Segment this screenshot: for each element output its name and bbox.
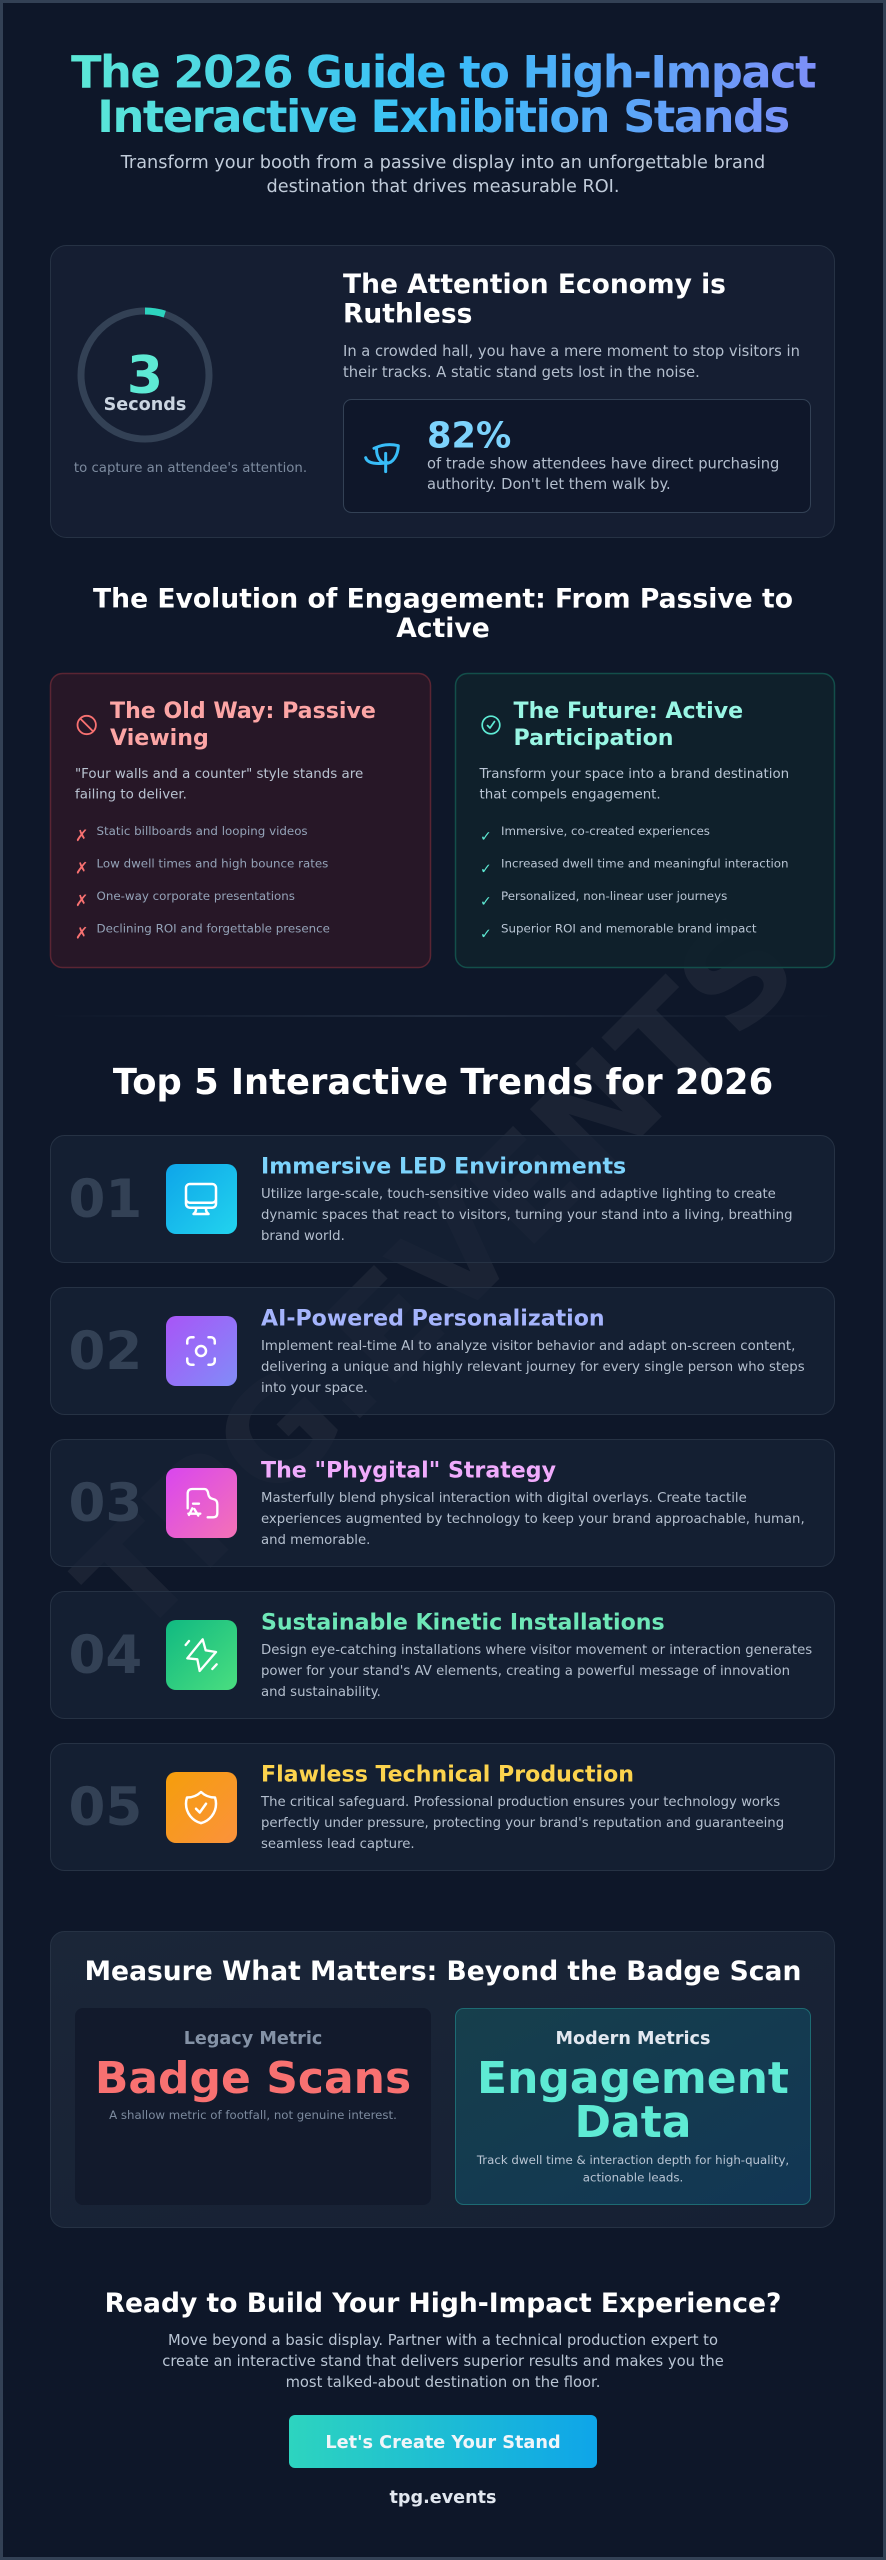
cta button: Let's Create Your Stand: [325, 2433, 561, 2453]
future list: ✓: [480, 862, 492, 878]
trend card 1: Immersive LED Environments: [261, 1154, 626, 1180]
old way list: ✗: [75, 891, 88, 910]
cta button: [289, 2415, 597, 2468]
trend card 5: perfectly under pressure, protecting your brand's reputation and guaranteeing: [261, 1816, 784, 1831]
future list: Personalized, non-linear user journeys: [501, 889, 727, 903]
modern metrics box: Data: [575, 2097, 691, 2148]
trend card 4: Sustainable Kinetic Installations: [261, 1610, 665, 1636]
attention heading: The Attention Economy is: [343, 269, 726, 300]
trend card 4: power for your stand's AV elements, creating a powerful message of innovation: [261, 1664, 790, 1679]
trend card 2: [50, 1288, 834, 1414]
legacy metric box: Badge Scans: [95, 2053, 411, 2104]
trend card 1: brand world.: [261, 1229, 345, 1244]
old way list: Static billboards and looping videos: [96, 824, 308, 838]
icon: tactile document: [166, 1468, 237, 1538]
trend card 3: 03: [68, 1473, 142, 1534]
old way list: Low dwell times and high bounce rates: [96, 856, 328, 870]
icon: lightning: [166, 1620, 237, 1690]
stat box: of trade show attendees have direct purchasing: [427, 456, 779, 472]
old way list: One-way corporate presentations: [96, 889, 295, 903]
website: tpg.events: [389, 2488, 497, 2508]
attention text: In a crowded hall, you have a mere moment to stop visitors in: [343, 343, 800, 360]
legacy metric box: Legacy Metric: [184, 2029, 322, 2049]
trend card 3: Masterfully blend physical interaction with digital overlays. Create tactile: [261, 1491, 747, 1506]
panel: old way: [50, 674, 430, 968]
trend card 1: dynamic spaces that react to visitors, turning your stand into a living, breathing: [261, 1208, 793, 1223]
trend card 1: 01: [68, 1169, 142, 1230]
modern metrics box: [456, 2008, 810, 2204]
trend card 3: [50, 1440, 834, 1566]
attention text: [343, 343, 800, 381]
cta text: Move beyond a basic display. Partner with a technical production expert to: [168, 2332, 718, 2349]
attention heading: Ruthless: [343, 298, 472, 330]
old way text: "Four walls and a counter" style stands are: [75, 767, 363, 782]
old way list: Declining ROI and forgettable presence: [96, 922, 330, 936]
trend card 4: [50, 1592, 834, 1718]
countdown ring: [81, 311, 209, 439]
subtitle: [120, 153, 765, 197]
heading: top 5 trends: Top 5 Interactive Trends for 2026: [113, 1062, 773, 1103]
attention heading: [343, 269, 726, 330]
legacy metric box: [75, 2008, 431, 2205]
future heading: [514, 698, 743, 751]
cta text: most talked-about destination on the floor.: [286, 2374, 600, 2391]
future heading: Participation: [514, 725, 673, 751]
watermark: TPG.EVENTS: [48, 885, 827, 1664]
old way text: failing to deliver.: [75, 788, 187, 803]
countdown ring: 3: [127, 346, 163, 406]
heading: evolution: The Evolution of Engagement: From Passive to: [93, 584, 793, 614]
future list: [480, 824, 788, 942]
title: Interactive Exhibition Stands: [97, 90, 789, 143]
trend card 3: The "Phygital" Strategy: [261, 1458, 556, 1484]
future list: ✓: [480, 926, 492, 942]
old way list: ✗: [75, 858, 88, 878]
trend card 2: 02: [68, 1321, 142, 1382]
stat box: 82%: [427, 416, 511, 456]
old way text: [75, 767, 363, 803]
future list: ✓: [480, 894, 492, 910]
old way heading: Viewing: [110, 725, 209, 751]
trend card 3: and memorable.: [261, 1533, 370, 1548]
legacy metric box: A shallow metric of footfall, not genuine interest.: [109, 2108, 397, 2122]
icon: hand pointer: [366, 445, 398, 472]
panel: measure what matters: [50, 1932, 834, 2228]
old way list: ✗: [75, 924, 88, 942]
modern metrics box: actionable leads.: [583, 2170, 683, 2184]
trend card 2: AI-Powered Personalization: [261, 1306, 605, 1332]
modern metrics box: Track dwell time & interaction depth for high-quality,: [476, 2153, 789, 2167]
call to action: [105, 2288, 781, 2508]
trend card 3: experiences augmented by technology to keep your brand approachable, human,: [261, 1512, 805, 1527]
trend card 2: delivering a unique and highly relevant journey for every single person who steps: [261, 1360, 805, 1375]
subtitle: destination that drives measurable ROI.: [266, 177, 620, 197]
trend card 5: seamless lead capture.: [261, 1837, 415, 1852]
header: [71, 46, 816, 197]
future text: Transform your space into a brand destination: [478, 767, 789, 782]
heading: evolution: Active: [396, 613, 490, 644]
panel: attention economy: [50, 246, 834, 538]
future list: Superior ROI and memorable brand impact: [501, 922, 757, 936]
cta text: [162, 2332, 724, 2391]
modern metrics box: Modern Metrics: [556, 2029, 710, 2049]
trend card 2: into your space.: [261, 1381, 368, 1396]
modern metrics box: Engagement: [477, 2053, 789, 2104]
future list: Immersive, co-created experiences: [501, 824, 710, 838]
icon: viewfinder: [166, 1316, 237, 1386]
future text: [478, 767, 789, 803]
icon: check circle: [482, 716, 500, 734]
old way list: [75, 824, 330, 942]
trend card 1: [50, 1136, 834, 1262]
countdown ring: Seconds: [104, 395, 186, 415]
future list: ✓: [480, 829, 492, 845]
trend card 5: 05: [68, 1777, 142, 1838]
cta heading: Ready to Build Your High-Impact Experience?: [105, 2288, 781, 2319]
old way list: ✗: [75, 826, 88, 845]
title: [71, 46, 816, 143]
trend card 4: 04: [68, 1625, 142, 1686]
trend card 4: Design eye-catching installations where visitor movement or interaction generates: [261, 1643, 812, 1658]
trend card 5: The critical safeguard. Professional production ensures your technology works: [260, 1795, 780, 1810]
countdown caption: to capture an attendee's attention.: [74, 461, 307, 476]
icon: monitor: [166, 1164, 237, 1234]
old way heading: The Old Way: Passive: [110, 698, 376, 724]
stat box: authority. Don't let them walk by.: [427, 476, 671, 493]
trend card 5: Flawless Technical Production: [261, 1762, 634, 1788]
trend card 2: Implement real-time AI to analyze visitor behavior and adapt on-screen content,: [261, 1339, 795, 1354]
attention text: their tracks. A static stand gets lost in the noise.: [343, 364, 700, 381]
trend card 1: Utilize large-scale, touch-sensitive video walls and adaptive lighting to create: [261, 1187, 776, 1202]
subtitle: Transform your booth from a passive display into an unforgettable brand: [120, 153, 765, 173]
panel: future: [456, 674, 834, 968]
title: The 2026 Guide to High-Impact: [71, 46, 816, 98]
measure heading: Measure What Matters: Beyond the Badge Scan: [85, 1956, 801, 1987]
heading: evolution: [93, 584, 793, 644]
stat box: [344, 400, 810, 512]
future list: Increased dwell time and meaningful interaction: [501, 856, 788, 870]
icon: shield check: [166, 1772, 237, 1843]
future text: that compels engagement.: [480, 788, 661, 803]
cta text: create an interactive stand that delivers superior results and makes you the: [162, 2353, 724, 2370]
icon: prohibited: [78, 716, 96, 734]
trend card 4: and sustainability.: [261, 1685, 381, 1700]
trend card 5: [50, 1744, 834, 1870]
future heading: The Future: Active: [514, 698, 743, 724]
old way heading: [110, 698, 376, 751]
